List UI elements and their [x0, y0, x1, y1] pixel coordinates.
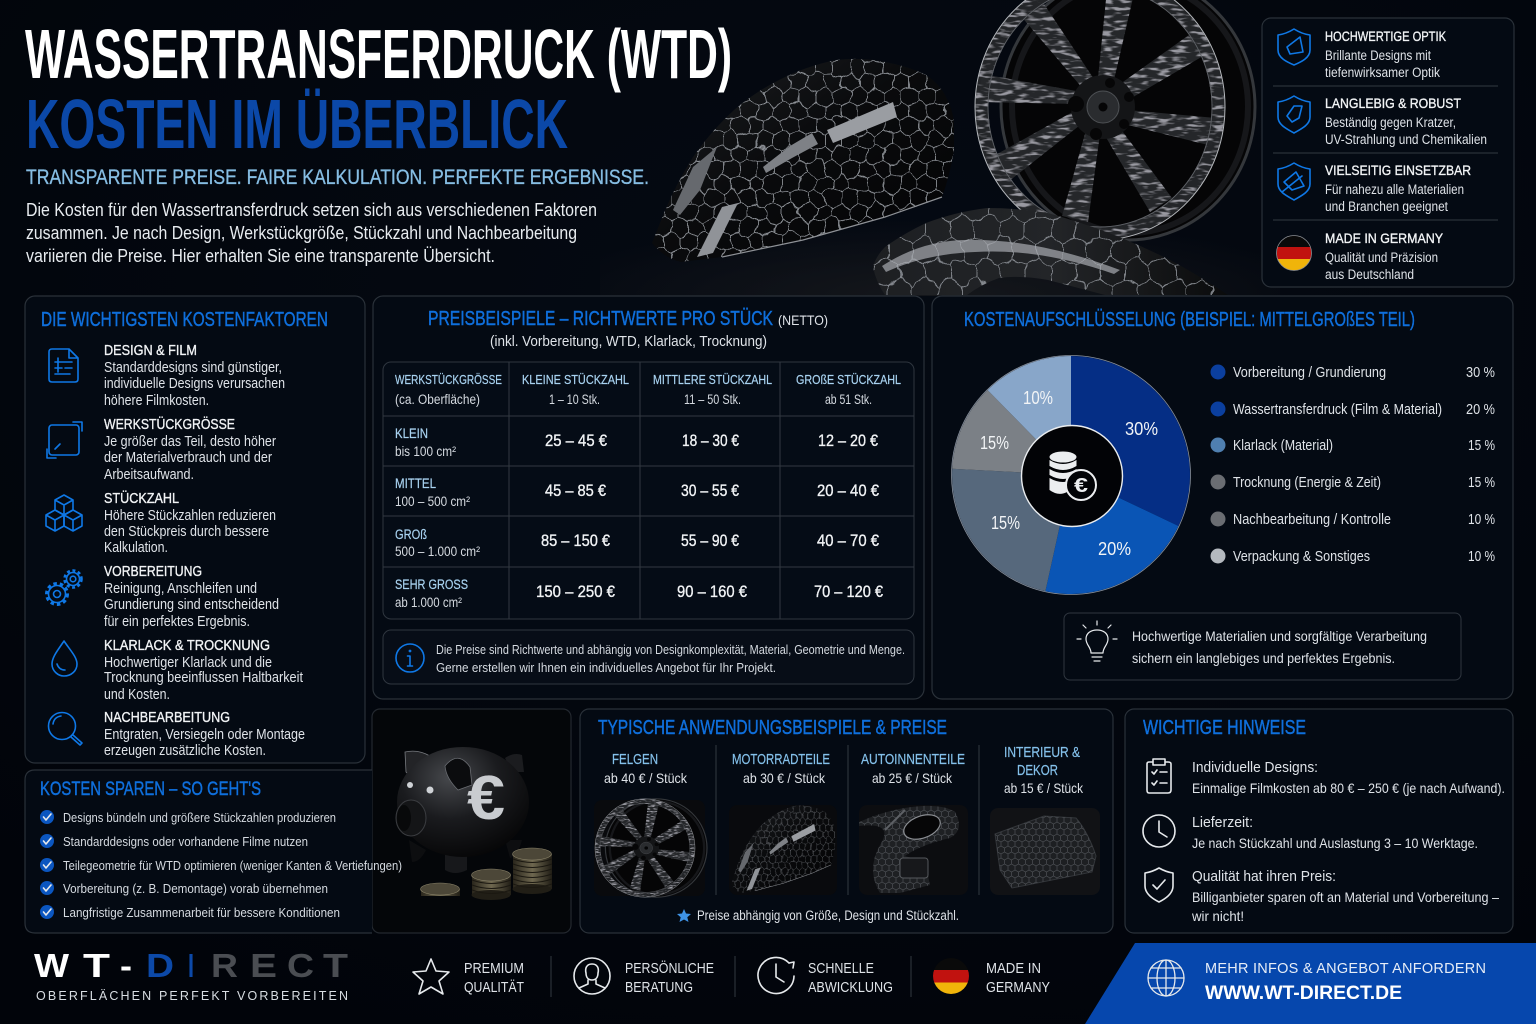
- legend row 5: [1210, 512, 1495, 528]
- slice labels: 15%: [991, 513, 1020, 533]
- footer logo: W: [34, 947, 70, 984]
- factor: werkstückgrösse: Arbeitsaufwand.: [104, 467, 194, 483]
- factor: vorbereitung: [104, 563, 279, 630]
- row: sehr gross: 150 – 250 €: [536, 582, 615, 601]
- call to action text: MEHR INFOS & ANGEBOT ANFORDERN: [1205, 961, 1486, 977]
- factor: werkstückgrösse: Je größer das Teil, desto höher: [104, 434, 276, 450]
- footer logo: T: [323, 947, 348, 984]
- column: motorradteile: ab 30 € / Stück: [743, 770, 826, 786]
- icon: coin stacks: [420, 848, 552, 900]
- footer: beratung: PERSÖNLICHE: [625, 959, 714, 977]
- footer logo: E: [250, 947, 277, 984]
- footer logo: I: [188, 947, 194, 984]
- subtitle: TRANSPARENTE PREISE. FAIRE KALKULATION. PERFEKTE ERGEBNISSE.: [26, 166, 649, 189]
- footer logo: C: [287, 947, 314, 984]
- column: interieur und dekor: ab 15 € / Stück: [1004, 780, 1084, 796]
- panel: preisbeispiele: [373, 296, 924, 699]
- factor: stückzahl: [104, 489, 276, 556]
- legend row 5: Nachbearbeitung / Kontrolle: [1233, 512, 1391, 528]
- slice labels: 10%: [1023, 388, 1053, 408]
- slice labels: 20%: [1098, 539, 1131, 559]
- footer logo: -: [120, 947, 132, 984]
- row: mittel: 20 – 40 €: [817, 481, 879, 500]
- row: sehr gross: SEHR GROSS: [395, 577, 468, 592]
- icon: german flag: [1276, 235, 1312, 271]
- legend row 4: 15 %: [1468, 475, 1495, 491]
- benefit: vielseitig: und Branchen geeignet: [1325, 199, 1448, 214]
- column: interieur und dekor: INTERIEUR &: [1004, 745, 1080, 761]
- benefit: langlebig: UV-Strahlung und Chemikalien: [1325, 132, 1487, 147]
- factor: nachbearbeitung: NACHBEARBEITUNG: [104, 709, 230, 726]
- row: sehr gross: 90 – 160 €: [677, 582, 747, 601]
- column: motorradteile: MOTORRADTEILE: [732, 752, 830, 768]
- factor: nachbearbeitung: Entgraten, Versiegeln oder Montage: [104, 727, 305, 743]
- hinweis: lieferzeit: Je nach Stückzahl und Auslastung 3 – 10 Werktage.: [1192, 835, 1478, 851]
- legend row 4: Trocknung (Energie & Zeit): [1233, 475, 1381, 491]
- heading: preisbeispiele: (inkl. Vorbereitung, WTD, Klarlack, Trocknung): [490, 333, 767, 350]
- legend row 3: [1210, 438, 1495, 454]
- factor: werkstückgrösse: WERKSTÜCKGRÖSSE: [104, 415, 235, 433]
- note text: Die Preise sind Richtwerte und abhängig von Designkomplexität, Material, Geometrie und Menge.: [436, 643, 905, 657]
- benefit: langlebig: Beständig gegen Kratzer,: [1325, 115, 1456, 130]
- note: price dependency: Preise abhängig von Größe, Design und Stückzahl.: [697, 908, 959, 923]
- footer: beratung: BERATUNG: [625, 980, 693, 996]
- row: klein: bis 100 cm²: [395, 444, 456, 459]
- table header: GROßE STÜCKZAHL: [796, 373, 901, 387]
- image: tank: [720, 793, 844, 905]
- heading: anwendungsbeispiele: TYPISCHE ANWENDUNGSBEISPIELE & PREISE: [598, 717, 947, 739]
- callout text: Hochwertige Materialien und sorgfältige Verarbeitung: [1132, 628, 1427, 644]
- factor: nachbearbeitung: erzeugen zusätzliche Kosten.: [104, 743, 266, 759]
- icon: piggy bank: €: [467, 764, 505, 833]
- callout text: [1132, 628, 1427, 666]
- footer: premium: PREMIUM: [464, 961, 524, 977]
- legend row 3: Klarlack (Material): [1233, 438, 1333, 454]
- hinweis: lieferzeit: Lieferzeit:: [1192, 814, 1253, 831]
- hinweis: lieferzeit: [1192, 814, 1478, 851]
- title: WASSERTRANSFERDRUCK (WTD): [25, 15, 732, 93]
- factor: vorbereitung: Reinigung, Anschleifen und: [104, 581, 257, 597]
- icon: size square: [47, 422, 82, 458]
- hero image: motorcycle tank: [620, 30, 980, 290]
- icon: gears: [46, 570, 82, 604]
- factor: stückzahl: STÜCKZAHL: [104, 489, 179, 507]
- footer: beratung: [574, 958, 714, 996]
- intro text: Die Kosten für den Wassertransferdruck setzen sich aus verschiedenen Faktoren: [26, 200, 597, 220]
- column: interieur und dekor: DEKOR: [1017, 763, 1058, 779]
- hinweis: qualität: wir nicht!: [1191, 908, 1244, 924]
- column: interieur und dekor: [990, 745, 1100, 895]
- heading: kostenfaktoren: DIE WICHTIGSTEN KOSTENFAKTOREN: [41, 309, 328, 331]
- row: klein: 25 – 45 €: [545, 431, 607, 450]
- factor: vorbereitung: für ein perfektes Ergebnis.: [104, 614, 250, 630]
- row: mittel: 30 – 55 €: [681, 481, 739, 500]
- icon: light bulb: [1077, 621, 1117, 661]
- footer: premium: QUALITÄT: [464, 979, 524, 996]
- footer logo: [34, 947, 348, 1003]
- table header: 1 – 10 Stk.: [549, 392, 600, 407]
- factor: klarlack: Hochwertiger Klarlack und die: [104, 655, 272, 671]
- tip 5: Langfristige Zusammenarbeit für bessere Konditionen: [63, 906, 340, 920]
- icon: shield vielseitig: [1278, 163, 1310, 200]
- factor: werkstückgrösse: [104, 415, 276, 483]
- table header: KLEINE STÜCKZAHL: [522, 373, 629, 387]
- hero image: fender: [873, 208, 1214, 295]
- icon: clipboard: [1147, 759, 1171, 793]
- row: mittel: 100 – 500 cm²: [395, 494, 470, 509]
- legend row 1: [1210, 364, 1495, 381]
- row: mittel: [395, 476, 879, 509]
- row: sehr gross: 70 – 120 €: [814, 582, 883, 601]
- legend row 1: 30 %: [1466, 365, 1495, 381]
- hero floor: [600, 170, 1280, 296]
- slice labels: [980, 388, 1158, 559]
- benefit: hochwertige optik: tiefenwirksamer Optik: [1325, 65, 1440, 80]
- column: autoinnenteile: AUTOINNENTEILE: [861, 752, 965, 768]
- benefit: hochwertige optik: HOCHWERTIGE OPTIK: [1325, 28, 1447, 44]
- heading: hinweise: WICHTIGE HINWEISE: [1143, 717, 1306, 739]
- hero image: wheel: [975, 0, 1255, 240]
- legend row 4: [1210, 474, 1495, 491]
- footer: made in germany: GERMANY: [986, 980, 1050, 996]
- factor: stückzahl: Kalkulation.: [104, 540, 168, 556]
- row: gross: 40 – 70 €: [817, 531, 879, 550]
- image: interior part: [859, 806, 959, 893]
- factor: design und film: [104, 342, 285, 409]
- factor: design und film: Standarddesigns sind günstiger,: [104, 360, 282, 376]
- benefit: langlebig: LANGLEBIG & ROBUST: [1325, 95, 1461, 111]
- row: sehr gross: ab 1.000 cm²: [395, 595, 462, 610]
- hinweis: designs: [1192, 759, 1505, 796]
- factor: stückzahl: den Stückpreis durch bessere: [104, 524, 269, 540]
- title: [25, 15, 732, 163]
- tip 1: Designs bündeln und größere Stückzahlen produzieren: [63, 811, 336, 825]
- column: motorradteile: [720, 752, 844, 905]
- footer: abwicklung: [758, 957, 893, 996]
- tip 2: Standarddesigns oder vorhandene Filme nutzen: [63, 835, 308, 849]
- panel: kostenfaktoren: [25, 296, 365, 763]
- intro text: variieren die Preise. Hier erhalten Sie eine transparente Übersicht.: [26, 246, 495, 266]
- factor: design und film: höhere Filmkosten.: [104, 393, 209, 409]
- footer: made in germany: MADE IN: [986, 961, 1041, 977]
- footer: made in germany: [933, 959, 1050, 994]
- factor: vorbereitung: VORBEREITUNG: [104, 563, 202, 580]
- column: felgen: [594, 752, 707, 897]
- benefit: langlebig: [1325, 95, 1487, 147]
- row: gross: [395, 527, 879, 559]
- icon: water drop: [52, 641, 77, 676]
- note box: [383, 630, 914, 684]
- legend row 6: Verpackung & Sonstiges: [1233, 549, 1370, 565]
- factor: stückzahl: Höhere Stückzahlen reduzieren: [104, 508, 276, 524]
- factor: klarlack: Trocknung beeinflussen Haltbarkeit: [104, 670, 303, 686]
- benefit: made in germany: [1325, 230, 1444, 282]
- legend row 5: 10 %: [1468, 512, 1495, 528]
- table header: (ca. Oberfläche): [395, 392, 480, 407]
- column: felgen: ab 40 € / Stück: [604, 770, 688, 786]
- icon: shield optik: [1278, 29, 1310, 65]
- row: gross: GROß: [395, 527, 427, 542]
- factor: klarlack: [104, 637, 303, 703]
- panel: wichtige hinweise: [1125, 709, 1513, 933]
- table header: ab 51 Stk.: [825, 392, 872, 407]
- pie chart: [952, 356, 1190, 594]
- legend row 6: 10 %: [1468, 549, 1495, 565]
- tip 4: Vorbereitung (z. B. Demontage) vorab übernehmen: [63, 882, 328, 896]
- intro text: zusammen. Je nach Design, Werkstückgröße, Stückzahl und Nachbearbeitung: [26, 223, 577, 243]
- table header: WERKSTÜCKGRÖSSE: [395, 373, 502, 387]
- legend: [1210, 364, 1495, 565]
- row: gross: 55 – 90 €: [681, 531, 739, 550]
- panel: kosten sparen: [25, 770, 402, 933]
- icon: info: [396, 644, 424, 672]
- row: mittel: MITTEL: [395, 476, 436, 491]
- icon: globe: [1148, 960, 1184, 996]
- row: gross: 85 – 150 €: [541, 531, 610, 550]
- row: mittel: 45 – 85 €: [545, 481, 606, 500]
- heading: preisbeispiele: PREISBEISPIELE – RICHTWERTE PRO STÜCK: [428, 308, 774, 330]
- callout text: sichern ein langlebiges und perfektes Ergebnis.: [1132, 650, 1395, 666]
- row: klein: 18 – 30 €: [682, 431, 739, 450]
- benefit: hochwertige optik: Brillante Designs mit: [1325, 48, 1431, 63]
- footer logo: D: [146, 947, 174, 984]
- hinweis: designs: Einmalige Filmkosten ab 80 € – 250 € (je nach Aufwand).: [1192, 780, 1505, 796]
- price table: [383, 362, 914, 619]
- icon: shield check: [1145, 868, 1173, 902]
- benefit: made in germany: Qualität und Präzision: [1325, 250, 1438, 265]
- hinweis: designs: Individuelle Designs:: [1192, 759, 1318, 776]
- icon: shield robust: [1278, 96, 1310, 133]
- factor: vorbereitung: Grundierung sind entscheidend: [104, 597, 279, 613]
- icon: piggy bank: [396, 747, 529, 873]
- icon: magnifier: [48, 712, 82, 745]
- factor: klarlack: und Kosten.: [104, 687, 170, 703]
- row: klein: KLEIN: [395, 426, 428, 441]
- table header: [395, 373, 901, 407]
- image: wheel: [595, 799, 707, 897]
- note text: [436, 643, 905, 675]
- icon: coins with euro: [1050, 452, 1096, 500]
- row: klein: 12 – 20 €: [818, 431, 878, 450]
- factor: design und film: DESIGN & FILM: [104, 342, 197, 359]
- icon: clock: [1143, 815, 1175, 847]
- footer logo: T: [83, 947, 110, 984]
- tip 3: Teilegeometrie für WTD optimieren (weniger Kanten & Vertiefungen): [63, 859, 402, 873]
- benefit: vielseitig: [1325, 162, 1471, 214]
- hinweis: qualität: [1191, 868, 1499, 924]
- icon: document: [49, 349, 78, 382]
- intro text: [26, 200, 597, 266]
- footer: abwicklung: ABWICKLUNG: [808, 980, 893, 996]
- call to action banner: [1085, 943, 1536, 1024]
- hinweis: qualität: Billiganbieter sparen oft an Material und Vorbereitung –: [1192, 889, 1499, 905]
- icon: coins with euro: €: [1074, 475, 1088, 497]
- icon: cubes: [46, 495, 82, 531]
- slice labels: 30%: [1125, 419, 1158, 439]
- panel: benefits: [1262, 18, 1514, 287]
- panel: anwendungsbeispiele: [580, 709, 1113, 933]
- benefit: vielseitig: VIELSEITIG EINSETZBAR: [1325, 162, 1471, 178]
- image: decor part: [995, 816, 1096, 888]
- row: klein: [395, 426, 878, 459]
- factor: werkstückgrösse: der Materialverbrauch und der: [104, 450, 272, 466]
- legend row 3: 15 %: [1468, 438, 1495, 454]
- benefit: vielseitig: Für nahezu alle Materialien: [1325, 182, 1464, 197]
- row: sehr gross: [395, 577, 883, 610]
- row: gross: 500 – 1.000 cm²: [395, 544, 480, 559]
- column: felgen: FELGEN: [612, 752, 658, 768]
- legend row 6: [1210, 548, 1495, 565]
- footer: premium: [413, 959, 524, 996]
- footer: abwicklung: SCHNELLE: [808, 961, 874, 977]
- factor: design und film: individuelle Designs verursachen: [104, 376, 285, 392]
- footer logo: R: [211, 947, 238, 984]
- benefit: made in germany: aus Deutschland: [1325, 267, 1414, 282]
- legend row 2: Wassertransferdruck (Film & Material): [1233, 402, 1442, 418]
- panel: kostenaufschlüsselung: [932, 296, 1513, 699]
- callout: [1064, 613, 1461, 680]
- heading: preisbeispiele: (NETTO): [778, 312, 828, 328]
- column: autoinnenteile: ab 25 € / Stück: [872, 770, 953, 786]
- call to action text: WWW.WT-DIRECT.DE: [1205, 982, 1402, 1004]
- table header: 11 – 50 Stk.: [684, 392, 741, 407]
- factor: klarlack: KLARLACK & TROCKNUNG: [104, 637, 270, 654]
- column: autoinnenteile: [859, 752, 968, 895]
- heading: preisbeispiele: [428, 308, 828, 350]
- hinweis: qualität: Qualität hat ihren Preis:: [1192, 868, 1336, 885]
- panel: piggy bank image: [372, 709, 571, 933]
- title: KOSTEN IM ÜBERBLICK: [26, 85, 568, 163]
- benefit: made in germany: MADE IN GERMANY: [1325, 230, 1444, 246]
- heading: kosten sparen: KOSTEN SPAREN – SO GEHT'S: [40, 779, 261, 800]
- note text: Gerne erstellen wir Ihnen ein individuelles Angebot für Ihr Projekt.: [436, 661, 776, 675]
- legend row 2: 20 %: [1466, 402, 1495, 418]
- slice labels: 15%: [980, 433, 1009, 453]
- table header: MITTLERE STÜCKZAHL: [653, 373, 772, 387]
- footer logo: OBERFLÄCHEN PERFEKT VORBEREITEN: [36, 989, 348, 1003]
- benefit: hochwertige optik: [1325, 28, 1447, 80]
- legend row 1: Vorbereitung / Grundierung: [1233, 365, 1386, 381]
- call to action text: [1205, 961, 1486, 1004]
- factor: nachbearbeitung: [104, 709, 305, 759]
